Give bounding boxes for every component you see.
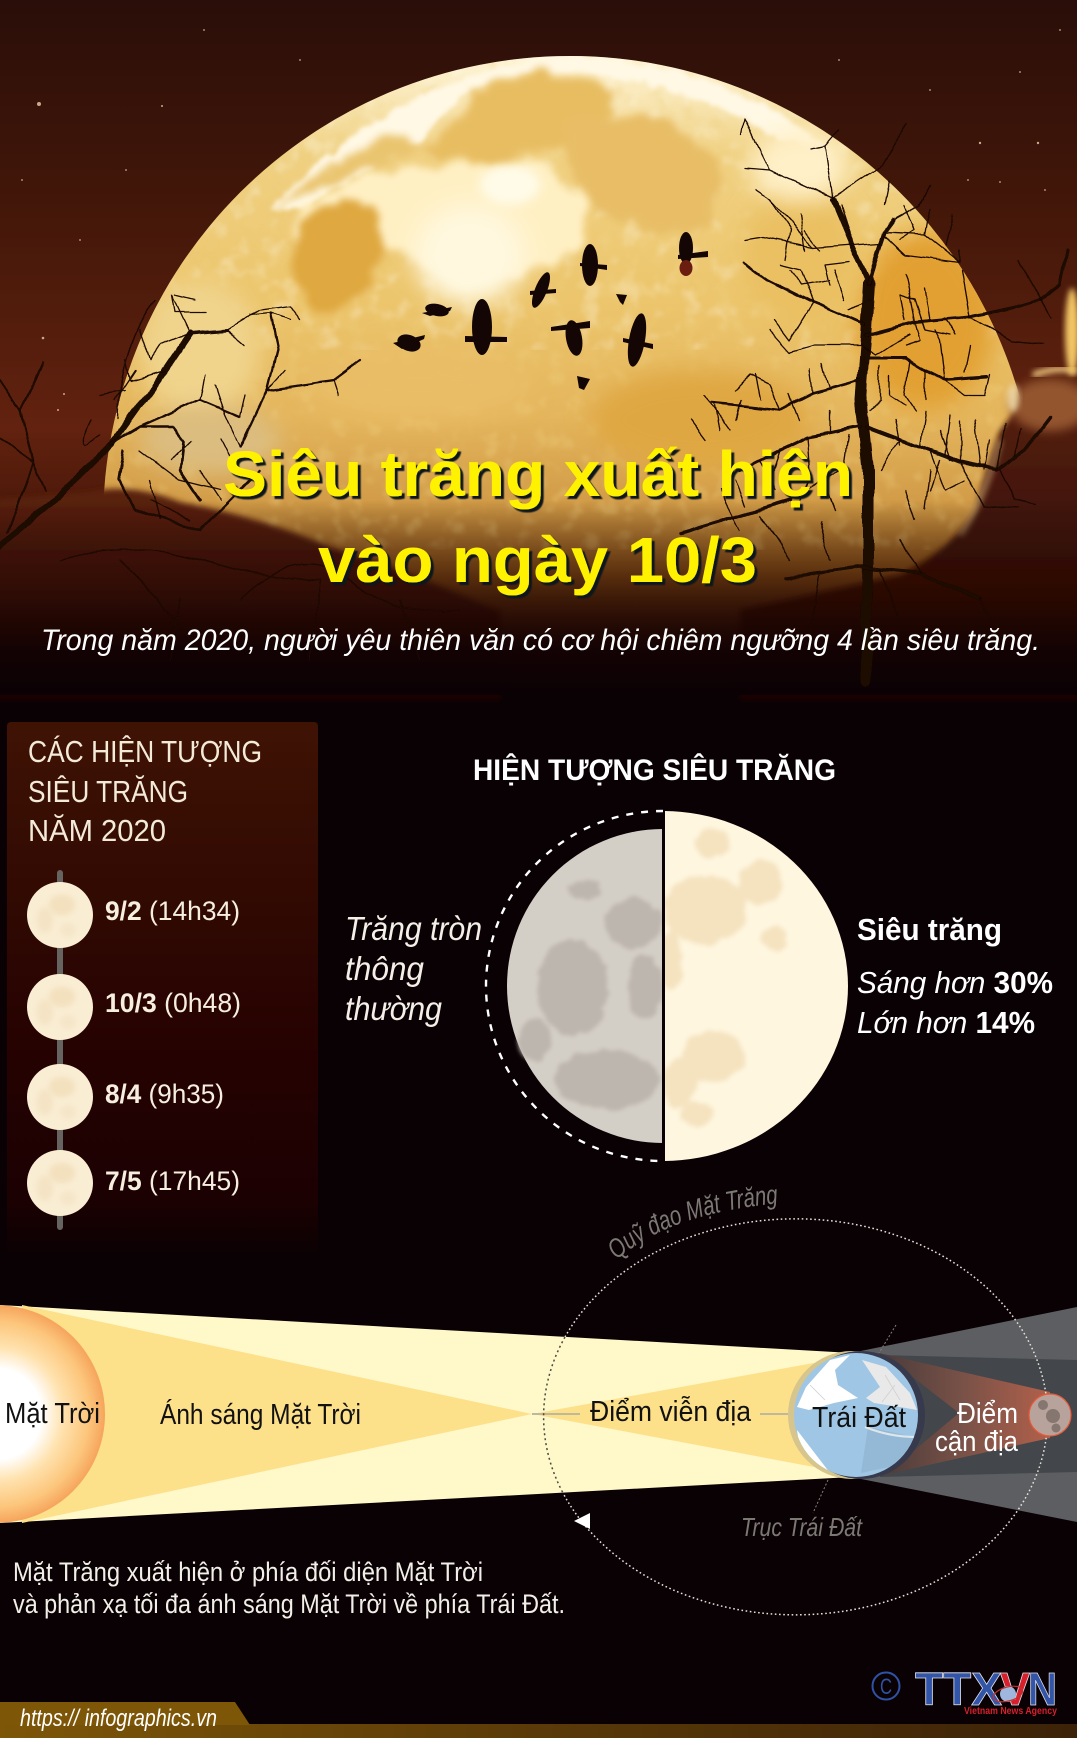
label: earth axis: Trục Trái Đất	[741, 1512, 863, 1542]
supermoon half	[665, 811, 848, 1161]
bottom fade	[0, 500, 1077, 695]
logo: TTXVN: C	[880, 1674, 892, 1699]
inner light cross	[22, 1305, 532, 1523]
date item 1: 9/2 (14h34)	[105, 896, 240, 926]
date item 1	[27, 882, 240, 948]
explanation text: và phản xạ tối đa ánh sáng Mặt Trời về phía Trái Đất.	[13, 1589, 565, 1619]
label: normal full moon: thường	[345, 990, 443, 1027]
title: vào ngày 10/3	[318, 524, 757, 596]
label: moon orbit: Quỹ đạo Mặt Trăng	[609, 1186, 777, 1258]
label: apogee: Điểm viễn địa	[590, 1395, 752, 1428]
label: supermoon stats: Sáng hơn 30%	[857, 965, 1053, 1000]
small moon at perigee	[1029, 1394, 1071, 1436]
clouds	[0, 288, 1077, 700]
panel heading: CÁC HIỆN TƯỢNG	[28, 734, 262, 769]
label: normal full moon: thông	[345, 950, 425, 987]
diagram: sun, earth and moon orbit	[0, 1186, 1077, 1616]
label: perigee	[935, 1398, 1019, 1458]
logo: TTXVN: TTX	[915, 1663, 1002, 1715]
label: normal full moon: Trăng tròn	[345, 910, 482, 947]
sun	[0, 1305, 105, 1523]
moon size comparison	[478, 811, 848, 1161]
logo: TTXVN: Vietnam News Agency	[964, 1705, 1057, 1717]
earth shadow cone	[851, 1307, 1077, 1522]
title	[223, 438, 853, 596]
logo: TTXVN: N	[1028, 1663, 1057, 1715]
explanation text	[13, 1557, 565, 1619]
title: Siêu trăng xuất hiện	[223, 438, 853, 510]
right bare tree	[680, 120, 1067, 680]
label: supermoon stats	[857, 912, 1053, 1040]
sun: Mặt Trời	[5, 1398, 100, 1430]
label: normal full moon	[345, 910, 482, 1027]
explanation text: Mặt Trăng xuất hiện ở phía đối diện Mặt Trời	[13, 1557, 483, 1587]
date item 4	[27, 1150, 240, 1216]
subtitle: Trong năm 2020, người yêu thiên văn có cơ hội chiêm ngưỡng 4 lần siêu trăng.	[41, 624, 1040, 657]
normal full moon half	[507, 829, 662, 1143]
date item 3: 8/4 (9h35)	[105, 1079, 224, 1109]
label: sunlight: Ánh sáng Mặt Trời	[160, 1398, 361, 1431]
footer bar with url	[0, 1702, 1077, 1738]
earth: Trái Đất	[812, 1402, 906, 1434]
footer bar with url: https:// infographics.vn	[20, 1705, 217, 1732]
earth axis	[813, 1325, 896, 1513]
panel heading: SIÊU TRĂNG	[28, 774, 188, 809]
logo: TTXVN	[872, 1663, 1057, 1717]
panel heading	[28, 734, 262, 848]
label: supermoon stats: Siêu trăng	[857, 912, 1002, 947]
stars	[21, 29, 1061, 411]
panel heading: NĂM 2020	[28, 813, 166, 848]
panel: supermoons in 2020	[7, 722, 318, 1252]
date item 3	[27, 1064, 224, 1130]
logo: TTXVN: V	[1000, 1663, 1030, 1715]
date item 2: 10/3 (0h48)	[105, 988, 241, 1018]
date item 2	[27, 974, 241, 1040]
date item 4: 7/5 (17h45)	[105, 1166, 240, 1196]
header illustration: moon, birds and trees over night sky	[0, 0, 1077, 700]
label: perigee: Điểm	[957, 1398, 1018, 1430]
moon orbit	[544, 1219, 1048, 1615]
label: perigee: cận địa	[935, 1426, 1019, 1458]
full moon	[104, 56, 1020, 624]
night sky	[0, 0, 1077, 690]
heading: supermoon phenomenon: HIỆN TƯỢNG SIÊU TRĂNG	[473, 753, 836, 787]
flock of birds	[393, 232, 708, 390]
sunlight beam	[0, 1305, 852, 1523]
left bare tree	[0, 295, 460, 660]
dashed normal-size outline	[486, 811, 663, 1161]
earth	[788, 1351, 925, 1479]
timeline line	[57, 870, 63, 1230]
label: supermoon stats: Lớn hơn 14%	[857, 1005, 1035, 1040]
